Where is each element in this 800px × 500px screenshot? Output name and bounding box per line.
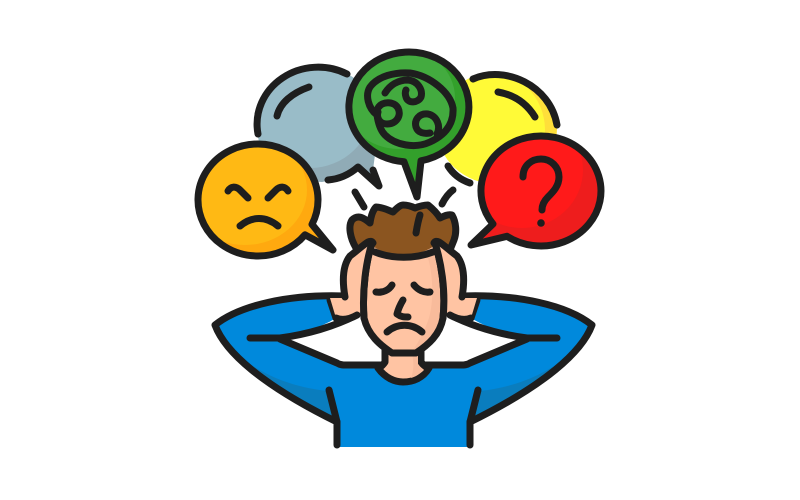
- icon: angry brows and mouth: [228, 187, 288, 226]
- stress dashes: [355, 190, 453, 207]
- eyes: [376, 285, 430, 292]
- right hand: [434, 241, 477, 320]
- neck: [378, 350, 429, 382]
- speech bubble: green with swirl: [343, 47, 469, 197]
- mouth: [387, 325, 422, 332]
- left hand: [330, 241, 373, 320]
- speech bubble: red question mark: [468, 132, 604, 250]
- icon: swirl: [368, 73, 453, 146]
- speech bubble: yellow: [444, 71, 560, 186]
- speech bubble: orange angry face: [183, 135, 333, 256]
- hand and face edges: [336, 243, 471, 319]
- icon: question mark: [523, 159, 559, 227]
- illustration: stressed man with speech bubbles: [194, 48, 604, 448]
- hair: [350, 205, 456, 258]
- speech bubble: grey-blue: [254, 64, 382, 190]
- shirt: [215, 296, 592, 447]
- man: [215, 205, 592, 447]
- face: [363, 215, 444, 353]
- nose: [397, 300, 408, 317]
